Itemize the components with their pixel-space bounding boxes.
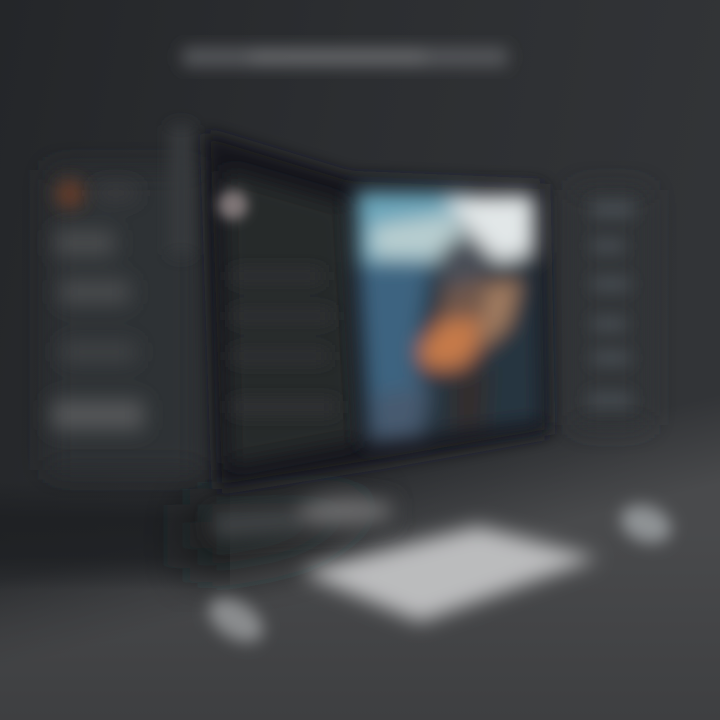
screen image base: dark sea: [354, 190, 542, 444]
screen image: dark lower figure: [450, 365, 490, 430]
screen image: figure shoulder: [435, 278, 488, 340]
title bar: [182, 47, 508, 67]
monitor: [205, 132, 550, 490]
panel: right sidebar: [575, 190, 647, 425]
screen image: bright sky: [445, 196, 532, 262]
interface text lines: [232, 270, 336, 414]
panel: left sidebar: [50, 125, 200, 470]
keyboard: [300, 526, 598, 622]
icon: avatar circle: [218, 190, 248, 220]
panel: dark interface: [224, 170, 358, 464]
icon: orange dot: [55, 179, 85, 209]
screen image: blue water: [358, 262, 430, 440]
monitor stand: [210, 496, 395, 540]
screen image: orange shape: [418, 318, 480, 368]
icon: mouse right: [615, 498, 677, 550]
left sidebar text lines: [52, 186, 144, 430]
screen image: lower blue water: [372, 385, 430, 442]
screen image: figure head: [438, 238, 486, 298]
icon: mouse left: [201, 589, 271, 651]
screen image: blue sky: [358, 192, 470, 262]
right sidebar text lines: [588, 202, 634, 406]
screen image: blurred photo: [354, 190, 542, 444]
screen image: tan arm: [480, 280, 520, 350]
monitor body: [205, 132, 550, 490]
sidebar divider strip: [170, 125, 192, 255]
screen image: pale horizon: [372, 214, 470, 258]
